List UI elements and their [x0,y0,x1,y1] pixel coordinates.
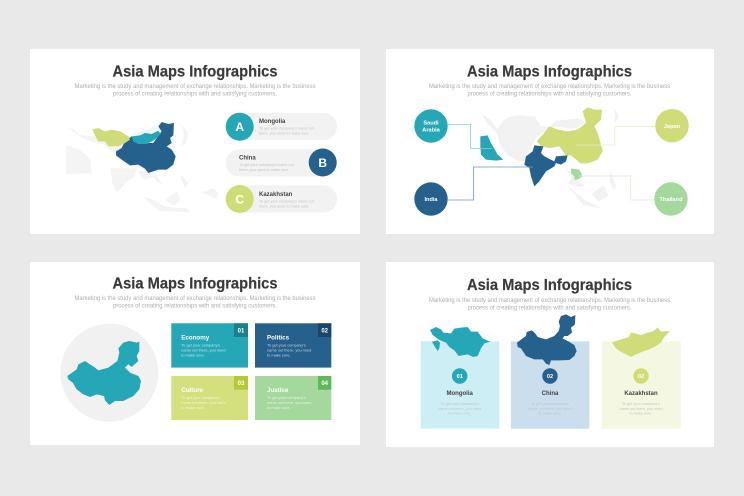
card: Culture [171,376,248,420]
title: Asia Maps Infographics [467,64,632,80]
connector: Thailand [579,176,655,200]
subtitle: Marketing is the study and management of exchange relationships. Marketing is the business [429,297,670,304]
card: Politics [255,323,331,368]
card: Culture: to make sure. [181,405,205,410]
column: China: name out there, you need [528,407,572,411]
map: Asia with four countries highlighted [480,107,619,208]
card: Politics: Politics [267,334,290,342]
card: Culture: 03 [238,381,245,387]
column: Mongolia: 01 [457,374,463,380]
title: Asia Maps Infographics [112,64,278,80]
panel: top-left slide [30,49,360,234]
card: Politics: to make sure. [267,352,291,358]
node: Thailand: Thailand [660,197,683,203]
card: Politics: name out there, you need [267,348,311,352]
subtitle: process of creating relationships with and satisfying customers. [113,302,277,310]
subtitle: process of creating relationships with and satisfying customers. [113,90,277,98]
callout: Kazakhstan: To get your company's name out [259,200,315,204]
node: Saudi Arabia: Arabia [422,128,441,134]
card: Culture: Culture [181,387,204,394]
connector: Saudi Arabia [448,124,492,148]
subtitle: process of creating relationships with and satisfying customers. [468,90,632,98]
card: Justice [255,376,331,420]
card: Justice: to make sure. [267,405,291,410]
card: Economy: Economy [181,334,210,342]
title: Asia Maps Infographics [467,277,632,294]
column: Kazakhstan: name out there, you need [619,407,663,411]
column: China: 02 [547,374,553,380]
node: India: India [424,197,438,203]
column: Kazakhstan [602,328,681,429]
card: Economy: to make sure. [181,352,205,358]
callout: China: B [318,156,327,170]
callout: Kazakhstan: there, you need to make sure. [259,204,309,208]
column: Kazakhstan: 02 [638,374,644,380]
callout: Mongolia: Mongolia [259,119,286,125]
subtitle [74,295,316,310]
subtitle [74,83,316,98]
node: Thailand [654,182,688,216]
node: India [414,182,448,216]
column: Mongolia: name out there, you need [438,407,481,411]
column: Mongolia: to make sure. [448,412,471,416]
connector: India [448,167,533,200]
column: China: China [542,391,559,397]
subtitle [429,83,670,98]
subtitle: Marketing is the study and management of exchange relationships. Marketing is the business [74,83,316,90]
column: China: To get your company's [531,402,569,406]
column: Kazakhstan: To get your company's [622,402,660,406]
title: Asia Maps Infographics [112,276,278,292]
callout: China: China [239,156,256,162]
card: Economy [171,323,248,368]
card: Culture: name out there, you need [181,400,226,405]
callout: China: To get your company's name out [239,163,295,167]
map: Asia with China, Mongolia, Kazakhstan highlighted [66,122,218,212]
node: Saudi Arabia [414,109,448,143]
callout: Kazakhstan: C [235,192,244,206]
callout: Mongolia: there, you need to make sure. [259,132,309,136]
column: Mongolia: Mongolia [447,391,474,397]
panel: top-right slide [386,49,714,234]
subtitle [429,297,670,312]
card: Culture: To get your company's [181,395,220,400]
card: Economy: 01 [238,328,245,334]
card: Politics: 02 [321,328,329,334]
card: Economy: To get your company's [181,342,220,348]
node: Japan: Japan [664,124,681,130]
panel: bottom-left slide [30,262,360,445]
column: Mongolia [421,327,499,429]
callout: Kazakhstan: Kazakhstan [259,192,293,198]
card: Justice: To get your company's [267,395,306,400]
callout: China: there, you need to make sure. [239,168,289,172]
column: Kazakhstan: to make sure. [629,412,653,416]
column: Kazakhstan: Kazakhstan [624,391,658,397]
column: China: to make sure. [538,412,562,416]
node: Japan [655,109,689,142]
callout: China [226,148,337,176]
column: Mongolia: To get your company's [441,402,479,406]
panel: bottom-right slide [386,262,714,447]
callout: Kazakhstan [226,185,337,213]
subtitle: process of creating relationships with and satisfying customers. [468,304,632,312]
card: Justice: Justice [267,387,289,394]
card: Justice: 04 [321,381,329,387]
callout: Mongolia [226,113,337,141]
subtitle: Marketing is the study and management of exchange relationships. Marketing is the business [74,295,316,302]
connector: Japan [576,126,655,145]
subtitle: Marketing is the study and management of exchange relationships. Marketing is the business [429,83,670,90]
callout: Mongolia: To get your company's name out [259,126,315,130]
card: Justice: name out there, you need [267,400,311,405]
column: China [511,314,589,429]
card: Economy: name out there, you need [181,348,226,352]
card: Politics: To get your company's [267,342,306,348]
callout: Mongolia: A [235,120,244,134]
node: Saudi Arabia: Saudi [423,120,439,126]
map: China in grey circle [60,324,158,422]
